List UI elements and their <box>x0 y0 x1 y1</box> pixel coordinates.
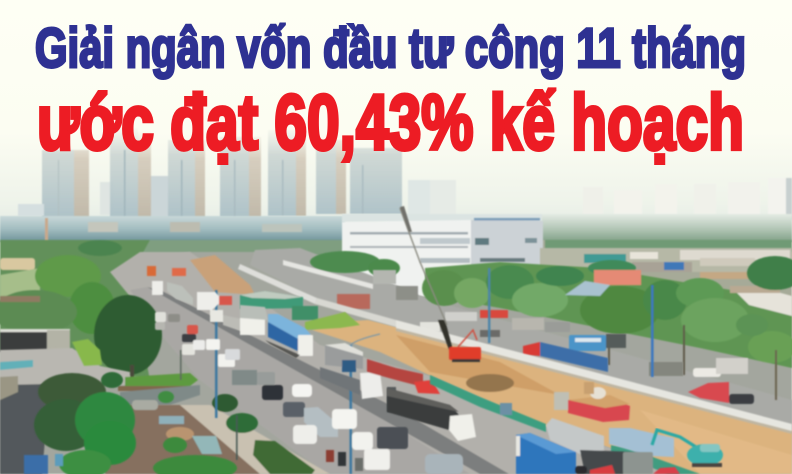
red cab corner <box>653 467 680 474</box>
white roofs at far right <box>730 286 792 316</box>
blue container with red cab <box>540 342 608 372</box>
upper traffic: box trucks near overpass <box>147 266 268 335</box>
white perimeter wall <box>238 260 792 434</box>
skyline: hazy towers <box>18 128 792 220</box>
dark tanker truck <box>387 388 476 441</box>
blue-roofed shed <box>565 281 610 296</box>
dark median carriageway <box>147 287 509 474</box>
gray and red trucks beside the green fence <box>320 343 440 412</box>
construction cut road soil and green-roof depot <box>190 255 360 330</box>
street lamps <box>180 268 654 474</box>
left greenery <box>0 255 162 390</box>
white car <box>693 368 721 377</box>
white factory building <box>342 218 543 300</box>
traffic: cars on main lanes <box>155 312 463 474</box>
orange-red warehouse <box>594 270 641 285</box>
roadside garden, dirt and walkway <box>105 391 330 474</box>
sky background <box>0 0 792 240</box>
horizon: distant trees and low buildings <box>0 214 792 242</box>
red truck cab behind wall <box>688 382 754 404</box>
red excavator and crane arm <box>400 206 481 362</box>
plaza and access road <box>0 339 200 474</box>
gatehouse and canopy <box>0 329 70 352</box>
teal excavator <box>652 430 723 467</box>
distant buildings, right side <box>540 248 792 279</box>
main highway surface <box>110 252 690 474</box>
vehicles on the far road <box>337 270 748 377</box>
white truck <box>716 358 748 374</box>
red pallets and materials <box>554 382 630 422</box>
green construction fence <box>430 375 700 474</box>
palm trees and front foliage <box>24 372 237 474</box>
blue bus <box>569 335 606 351</box>
construction site: soil <box>312 320 792 474</box>
foreground cement tanker, blue container and skip <box>516 418 674 474</box>
blue container truck <box>265 314 313 358</box>
title <box>35 16 746 166</box>
tree band beyond the wall <box>310 251 792 400</box>
photo: ground base <box>0 240 792 474</box>
gray pickup <box>649 362 683 376</box>
far side road beyond the wall <box>250 248 792 432</box>
dark green trees far right <box>747 256 792 290</box>
